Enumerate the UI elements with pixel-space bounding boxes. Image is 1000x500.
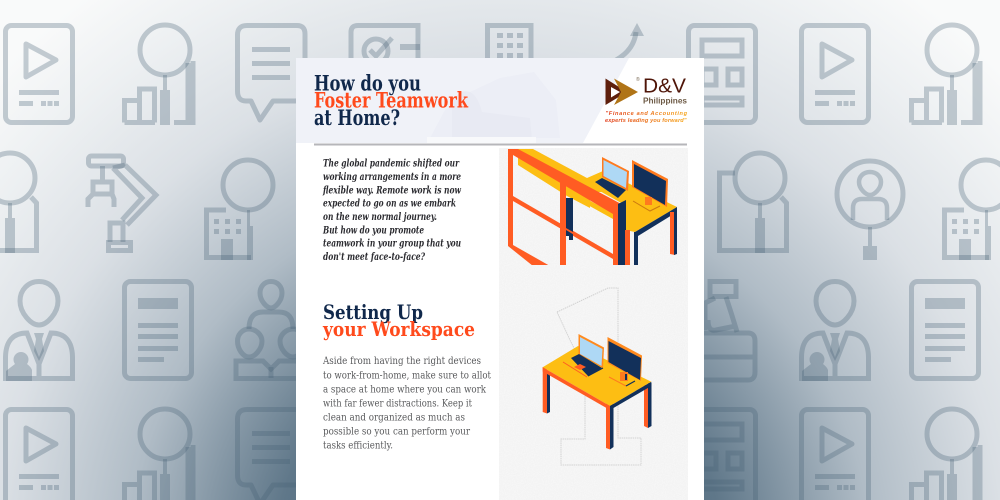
icon: group of people bbox=[236, 282, 306, 378]
desk top bbox=[543, 346, 651, 406]
intro text: working arrangements in a more bbox=[323, 172, 461, 183]
intro text: flexible way. Remote work is now bbox=[322, 185, 461, 196]
section paragraph: possible so you can perform your bbox=[323, 427, 470, 438]
intro text: on the new normal journey. bbox=[323, 212, 437, 223]
intro text: The global pandemic shifted our bbox=[323, 158, 460, 170]
intro text bbox=[322, 158, 461, 263]
icon: magnifier person bbox=[837, 161, 903, 260]
title: How do you bbox=[314, 70, 421, 96]
section paragraph: to work-from-home, make sure to allot bbox=[323, 370, 491, 381]
illustration: isometric desk bbox=[543, 334, 652, 450]
icon: magnifier bar chart bottom right bbox=[912, 409, 980, 500]
logo: D&V Philippines bbox=[605, 76, 688, 124]
icon: businessman bbox=[6, 282, 72, 381]
icon: hand on stack bbox=[700, 282, 755, 380]
laptop bbox=[595, 157, 629, 198]
intro text: expected to go on as we embark bbox=[323, 199, 456, 210]
icon: video document bbox=[6, 26, 72, 122]
section paragraph: a space at home where you can work bbox=[323, 385, 487, 396]
desk edges bbox=[543, 367, 610, 410]
icon: video document bottom bbox=[6, 410, 72, 500]
title: Foster Teamwork bbox=[314, 88, 468, 112]
icon: speech bubble bottom bbox=[238, 410, 305, 500]
section paragraph: tasks efficiently. bbox=[323, 441, 393, 452]
section paragraph: clean and organized as much as bbox=[323, 413, 465, 424]
icon: robot arm bbox=[88, 156, 156, 250]
section heading: your Workspace bbox=[322, 317, 475, 341]
logo: D&V Philippines: "Finance and Accounting bbox=[606, 111, 688, 117]
intro text: But how do you promote bbox=[322, 225, 424, 236]
icon: magnifier bar chart bbox=[124, 25, 193, 125]
logo: D&V Philippines: ® bbox=[636, 76, 640, 83]
desk legs bbox=[543, 367, 652, 450]
panel: header band bbox=[296, 58, 629, 143]
monitor bbox=[608, 337, 642, 386]
icon: magnifier box left bbox=[0, 153, 36, 253]
intro text: don't meet face-to-face? bbox=[323, 252, 425, 263]
panel: textured illustration background bbox=[499, 148, 688, 500]
logo mark bbox=[606, 78, 638, 105]
section paragraph: with far fewer distractions. Keep it bbox=[323, 399, 472, 410]
title: at Home? bbox=[314, 105, 400, 130]
frame beams bbox=[508, 149, 625, 266]
title bbox=[314, 70, 468, 130]
illustration: cropped isometric desk bbox=[508, 149, 677, 266]
panel: infographic page bbox=[296, 58, 704, 500]
section heading bbox=[322, 300, 475, 341]
icon: video document right bbox=[802, 26, 868, 122]
icon: magnifier bar chart bottom bbox=[124, 409, 193, 500]
icon: calculator layout bbox=[688, 26, 756, 122]
logo: D&V Philippines: D&V bbox=[643, 76, 687, 98]
icon: speech bubble bbox=[238, 26, 305, 120]
icon: growth arrow bbox=[616, 23, 644, 60]
icon: document bbox=[124, 282, 192, 378]
icon: checklist bbox=[351, 26, 420, 63]
icon: magnifier building right bbox=[944, 160, 1000, 260]
monitor bbox=[632, 160, 668, 211]
icon: magnifier bar chart right bbox=[912, 25, 980, 125]
section paragraph: Aside from having the right devices bbox=[322, 356, 481, 367]
icon: calculator layout bottom bbox=[688, 410, 756, 500]
intro text: teamwork in your group that you bbox=[323, 239, 461, 250]
icon: magnifier box right bbox=[720, 153, 786, 253]
icon: magnifier building bbox=[206, 160, 273, 260]
number 1 outline bbox=[557, 288, 641, 465]
section heading: Setting Up bbox=[323, 300, 423, 324]
logo: D&V Philippines: Philippines bbox=[643, 95, 687, 105]
section paragraph bbox=[322, 356, 491, 452]
laptop bbox=[563, 334, 604, 377]
icon: office building bbox=[488, 26, 531, 62]
icon: video document bottom right bbox=[802, 410, 868, 500]
icon: businessman right bbox=[802, 282, 868, 381]
logo: D&V Philippines: experts leading you forward" bbox=[605, 118, 687, 124]
icon: document right bbox=[912, 282, 978, 378]
